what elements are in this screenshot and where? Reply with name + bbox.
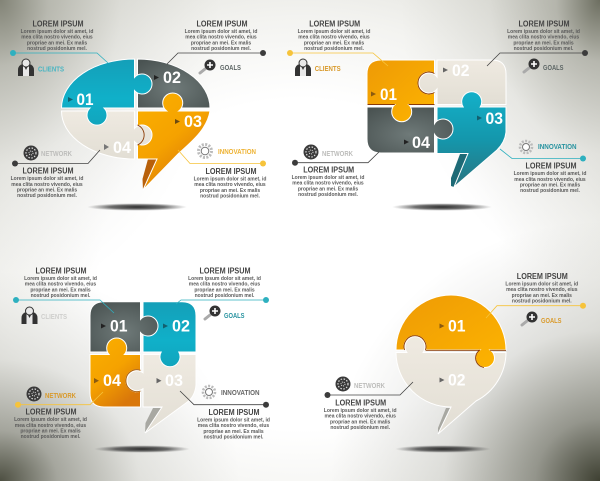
leader line goals bbox=[167, 50, 266, 64]
panel: oval puzzle bubble bbox=[10, 20, 266, 211]
number 04 bbox=[404, 134, 431, 152]
text block bottom right: propriae an mei. Ex malis bbox=[203, 429, 264, 435]
leader line innovation bbox=[178, 150, 266, 166]
shadow bbox=[94, 445, 190, 453]
text block bottom left bbox=[324, 398, 397, 431]
icon: person bbox=[22, 307, 38, 324]
text block bottom left: LOREM IPSUM bbox=[303, 165, 354, 174]
text block bottom left: nostrud posidonium mel. bbox=[21, 434, 81, 440]
leader line goals bbox=[176, 297, 269, 304]
leader line network bbox=[324, 382, 413, 398]
number 03 bbox=[477, 110, 503, 128]
text block bottom left: Lorem ipsum dolor sit amet, id bbox=[324, 408, 397, 414]
label clients: CLIENTS bbox=[38, 64, 64, 74]
puzzle piece 03 cream bbox=[127, 354, 196, 433]
number 03 bbox=[156, 372, 183, 390]
icon: globe bbox=[336, 376, 350, 392]
number 02 bbox=[163, 318, 190, 336]
shadow bbox=[87, 203, 187, 211]
puzzle piece 04 cream bbox=[62, 111, 152, 159]
icon: globe bbox=[26, 386, 42, 402]
number 01 bbox=[101, 318, 128, 336]
text block bottom right: LOREM IPSUM bbox=[206, 167, 257, 176]
notch shade bbox=[368, 72, 434, 104]
number 04: 04 bbox=[412, 134, 431, 152]
text block top left: Lorem ipsum dolor sit amet, id bbox=[298, 29, 370, 35]
puzzle piece 02 teal bbox=[143, 302, 196, 367]
text block bottom right: nostrud posidonium mel. bbox=[520, 188, 580, 194]
number 04 bbox=[94, 372, 122, 390]
label clients: CLIENTS bbox=[41, 312, 67, 321]
text block top right: Lorem ipsum dolor sit amet, id bbox=[188, 276, 261, 282]
text block top right bbox=[505, 272, 578, 304]
notch shade bbox=[404, 336, 506, 367]
text block top right: nostrud posidonium mel. bbox=[512, 298, 572, 304]
panel: rounded square puzzle bubble bbox=[13, 266, 270, 453]
number 03: 03 bbox=[486, 110, 503, 128]
text block top right: nostrud posidonium mel. bbox=[195, 293, 255, 299]
number 02: 02 bbox=[448, 372, 466, 390]
text block top right: nostrud posidonium mel. bbox=[191, 46, 251, 52]
text block bottom right bbox=[194, 167, 266, 200]
puzzle piece 02 dark bbox=[138, 59, 210, 108]
text block bottom right: mea clita nostro vivendo, eius bbox=[514, 177, 586, 183]
notch shade bbox=[138, 125, 144, 145]
text block bottom right: propriae an mei. Ex malis bbox=[520, 183, 580, 189]
number 03: 03 bbox=[165, 372, 183, 390]
leader line innovation bbox=[500, 149, 586, 162]
label innovation: INNOVATION bbox=[221, 388, 260, 397]
text block bottom left: mea clita nostro vivendo, eius bbox=[11, 182, 83, 188]
text block top left bbox=[298, 20, 370, 52]
text block top right bbox=[507, 20, 580, 52]
number 03 bbox=[175, 113, 202, 131]
number 01 bbox=[371, 86, 397, 104]
text block bottom right: mea clita nostro vivendo, eius bbox=[194, 182, 266, 188]
puzzle piece 04 orange bbox=[90, 338, 140, 407]
text block bottom left: LOREM IPSUM bbox=[26, 408, 77, 417]
text block bottom left: nostrud posidonium mel. bbox=[298, 192, 358, 198]
text block top left: propriae an mei. Ex malis bbox=[30, 287, 91, 293]
text block top right bbox=[185, 20, 257, 52]
text block bottom right: nostrud posidonium mel. bbox=[200, 194, 260, 200]
text block top right: mea clita nostro vivendo, eius bbox=[185, 35, 257, 41]
text block top left: Lorem ipsum dolor sit amet, id bbox=[24, 276, 97, 282]
tail edge cream bbox=[438, 408, 451, 434]
panel: square puzzle bubble bbox=[287, 20, 588, 211]
text block top left: Lorem ipsum dolor sit amet, id bbox=[21, 29, 93, 35]
text block top right: propriae an mei. Ex malis bbox=[191, 40, 251, 46]
puzzle piece 04 dark bbox=[367, 107, 453, 153]
text block bottom left bbox=[11, 167, 83, 199]
icon: gear bbox=[198, 144, 212, 158]
text block top left: mea clita nostro vivendo, eius bbox=[25, 282, 96, 288]
label goals: GOALS bbox=[224, 311, 245, 320]
number 02: 02 bbox=[452, 62, 470, 80]
text block bottom left: propriae an mei. Ex malis bbox=[20, 429, 81, 435]
text block top left: nostrud posidonium mel. bbox=[27, 46, 87, 52]
text block top right: propriae an mei. Ex malis bbox=[194, 287, 255, 293]
label innovation: INNOVATION bbox=[538, 142, 576, 151]
text block top right: propriae an mei. Ex malis bbox=[513, 40, 574, 46]
text block top left: nostrud posidonium mel. bbox=[304, 46, 364, 52]
puzzle piece 01 orange bbox=[396, 295, 506, 368]
icon: magnifier goals bbox=[200, 60, 216, 73]
number 04: 04 bbox=[113, 139, 132, 157]
puzzle piece 01 teal bbox=[62, 59, 152, 125]
text block bottom left: propriae an mei. Ex malis bbox=[330, 419, 391, 425]
label network: NETWORK bbox=[354, 381, 386, 390]
text block top left: LOREM IPSUM bbox=[36, 266, 87, 275]
shadow bbox=[392, 203, 492, 211]
text block bottom left: Lorem ipsum dolor sit amet, id bbox=[292, 175, 364, 181]
text block bottom right: mea clita nostro vivendo, eius bbox=[198, 423, 269, 429]
panel: round puzzle bubble bbox=[324, 272, 586, 453]
text block top left: LOREM IPSUM bbox=[32, 20, 84, 28]
text block bottom left: mea clita nostro vivendo, eius bbox=[15, 423, 86, 429]
text block bottom left: mea clita nostro vivendo, eius bbox=[292, 180, 364, 186]
leader line goals bbox=[487, 50, 588, 66]
leader line clients bbox=[287, 50, 388, 66]
label clients: CLIENTS bbox=[315, 64, 341, 73]
text block bottom left: Lorem ipsum dolor sit amet, id bbox=[11, 176, 83, 182]
number 01: 01 bbox=[76, 91, 94, 109]
text block bottom right: nostrud posidonium mel. bbox=[204, 434, 264, 440]
leader line clients bbox=[13, 297, 114, 313]
number 01: 01 bbox=[380, 86, 397, 104]
icon: gear bbox=[203, 386, 215, 398]
icon: magnifier goals bbox=[205, 306, 220, 319]
leader line network bbox=[292, 152, 379, 166]
text block top left: mea clita nostro vivendo, eius bbox=[298, 35, 370, 41]
icon: magnifier goals bbox=[522, 312, 538, 325]
label goals: GOALS bbox=[220, 63, 241, 72]
icon: gear bbox=[520, 141, 532, 153]
number 02 bbox=[154, 69, 181, 87]
text block bottom right: LOREM IPSUM bbox=[208, 408, 260, 417]
leader line network bbox=[12, 150, 100, 166]
leader line goals bbox=[486, 303, 586, 318]
text block top left: mea clita nostro vivendo, eius bbox=[21, 35, 93, 41]
text block top left: LOREM IPSUM bbox=[309, 20, 360, 28]
icon: person bbox=[18, 59, 34, 76]
text block top right: nostrud posidonium mel. bbox=[514, 46, 574, 52]
number 04 bbox=[104, 139, 132, 157]
text block top left: propriae an mei. Ex malis bbox=[304, 40, 364, 46]
text block bottom left: LOREM IPSUM bbox=[335, 398, 386, 407]
number 01 bbox=[440, 318, 466, 336]
number 01: 01 bbox=[448, 318, 466, 336]
text block bottom left bbox=[14, 408, 87, 440]
number 02: 02 bbox=[163, 69, 181, 87]
number 01 bbox=[68, 91, 94, 109]
text block bottom left: nostrud posidonium mel. bbox=[17, 193, 77, 199]
text block top right: Lorem ipsum dolor sit amet, id bbox=[185, 29, 257, 35]
text block top left: nostrud posidonium mel. bbox=[31, 293, 91, 299]
text block top right: LOREM IPSUM bbox=[196, 20, 248, 28]
tail edge cream bbox=[145, 408, 162, 433]
number 03: 03 bbox=[184, 113, 202, 131]
icon: globe bbox=[24, 146, 38, 160]
puzzle piece 03 orange bbox=[138, 93, 210, 190]
text block top right: mea clita nostro vivendo, eius bbox=[508, 35, 579, 41]
label network: NETWORK bbox=[322, 149, 354, 158]
text block bottom right: propriae an mei. Ex malis bbox=[200, 188, 260, 194]
label network: NETWORK bbox=[45, 391, 77, 400]
leader line network bbox=[15, 392, 103, 408]
text block top right bbox=[188, 266, 261, 299]
text block top right: LOREM IPSUM bbox=[518, 20, 570, 29]
text block top right: LOREM IPSUM bbox=[517, 272, 568, 281]
text block top left bbox=[24, 266, 97, 299]
icon: person bbox=[295, 59, 311, 76]
text block bottom right bbox=[514, 162, 586, 194]
text block bottom right: Lorem ipsum dolor sit amet, id bbox=[194, 176, 266, 182]
number 01: 01 bbox=[110, 318, 128, 336]
text block top left bbox=[21, 20, 93, 52]
tail edge orange bbox=[142, 159, 157, 190]
text block bottom left: Lorem ipsum dolor sit amet, id bbox=[14, 417, 87, 423]
text block top right: Lorem ipsum dolor sit amet, id bbox=[505, 282, 578, 288]
notch shade bbox=[126, 370, 140, 392]
icon: magnifier goals bbox=[524, 58, 540, 72]
number 04: 04 bbox=[103, 372, 122, 390]
label network: NETWORK bbox=[41, 149, 73, 158]
puzzle piece 01 orange bbox=[367, 60, 434, 122]
text block bottom left bbox=[292, 165, 364, 198]
label innovation: INNOVATION bbox=[218, 147, 256, 156]
puzzle piece 02 cream bbox=[419, 60, 506, 104]
text block bottom right: LOREM IPSUM bbox=[526, 162, 577, 171]
text block bottom left: LOREM IPSUM bbox=[22, 167, 74, 176]
text block bottom left: propriae an mei. Ex malis bbox=[298, 186, 358, 192]
text block bottom left: propriae an mei. Ex malis bbox=[17, 188, 77, 194]
tail edge teal bbox=[451, 154, 468, 187]
text block top right: mea clita nostro vivendo, eius bbox=[506, 287, 578, 293]
number 02 bbox=[443, 62, 470, 80]
text block bottom right bbox=[197, 408, 270, 440]
text block top left: propriae an mei. Ex malis bbox=[27, 40, 87, 46]
text block bottom left: mea clita nostro vivendo, eius bbox=[324, 414, 396, 420]
text block top right: propriae an mei. Ex malis bbox=[512, 293, 572, 299]
puzzle piece 02 cream bbox=[396, 337, 506, 434]
leader line innovation bbox=[180, 391, 269, 408]
text block top right: Lorem ipsum dolor sit amet, id bbox=[507, 29, 580, 35]
text block top right: LOREM IPSUM bbox=[200, 266, 251, 275]
shadow bbox=[395, 445, 491, 453]
text block bottom right: Lorem ipsum dolor sit amet, id bbox=[197, 418, 270, 424]
text block bottom left: nostrud posidonium mel. bbox=[330, 425, 391, 431]
number 02: 02 bbox=[172, 318, 190, 336]
puzzle piece 03 teal bbox=[437, 92, 506, 187]
number 02 bbox=[440, 372, 466, 390]
label goals: GOALS bbox=[543, 63, 564, 72]
puzzle piece 01 dark bbox=[90, 302, 158, 352]
label goals: GOALS bbox=[541, 316, 562, 325]
text block bottom right: Lorem ipsum dolor sit amet, id bbox=[514, 171, 586, 177]
icon: globe bbox=[304, 144, 318, 160]
text block top right: mea clita nostro vivendo, eius bbox=[189, 282, 260, 288]
leader line clients bbox=[10, 50, 108, 63]
